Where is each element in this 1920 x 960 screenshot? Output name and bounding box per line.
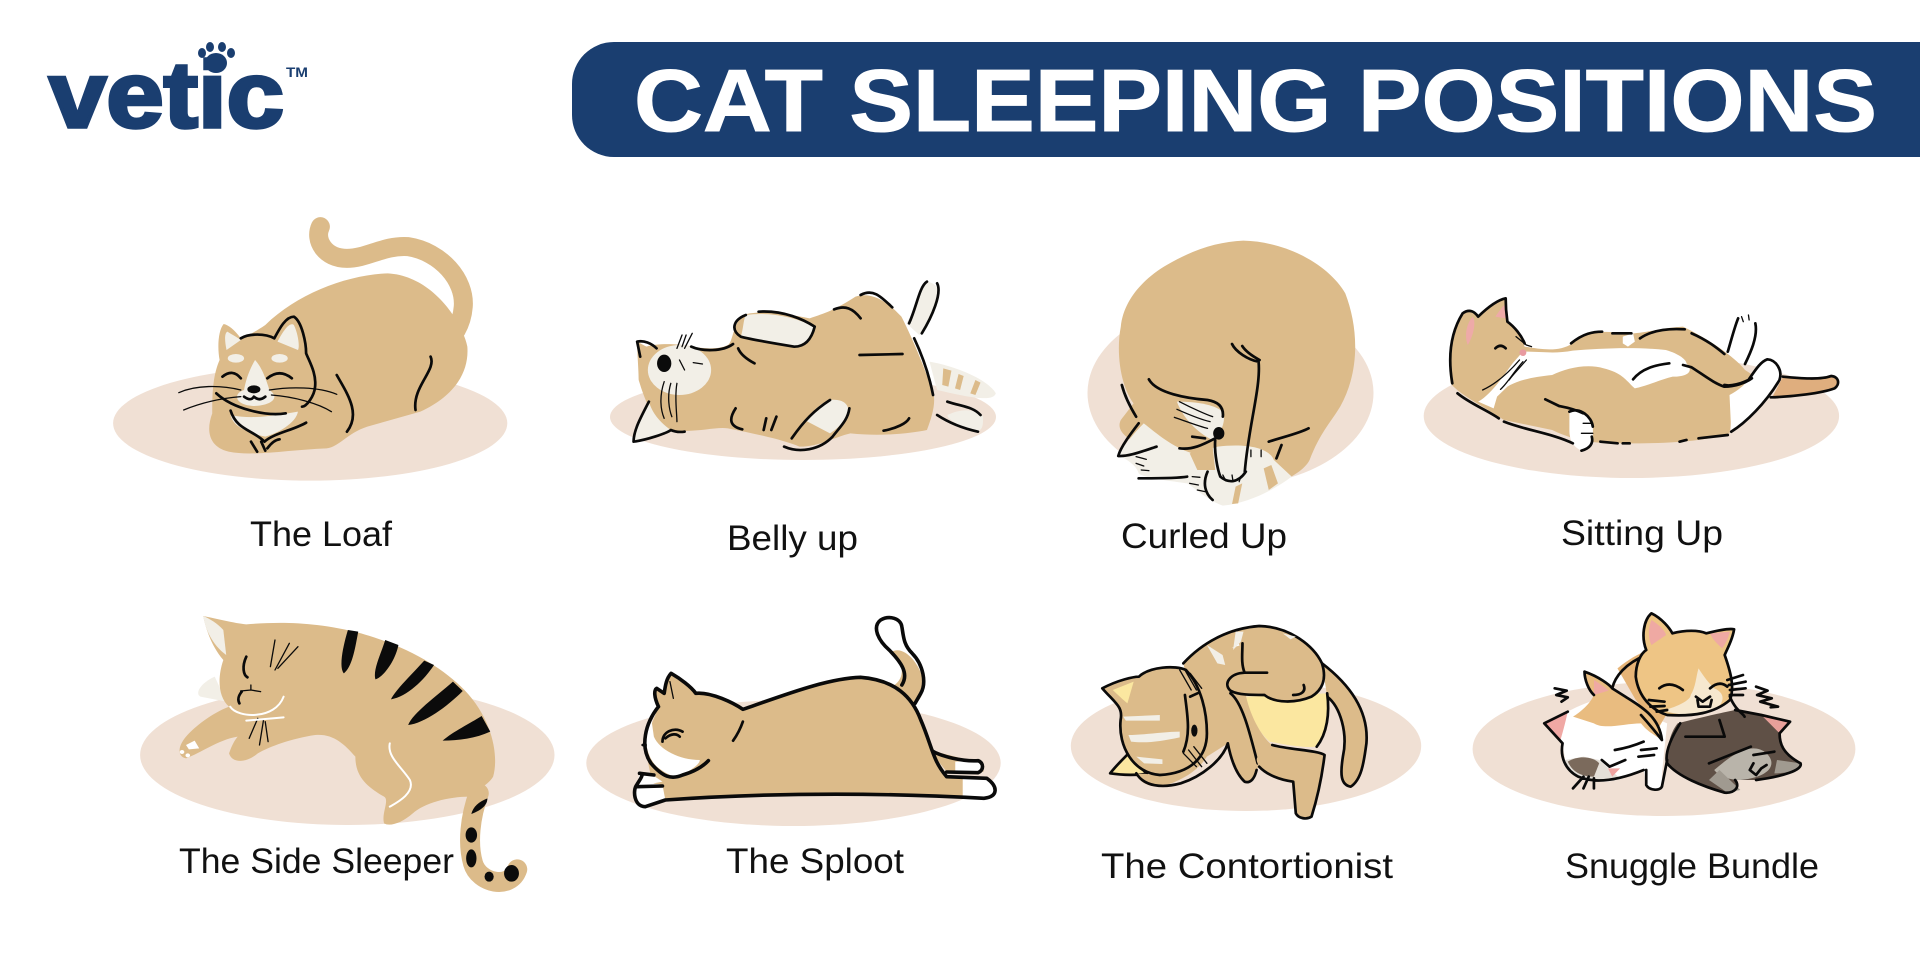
cat: curled up <box>1118 241 1355 506</box>
label: The Side Sleeper <box>179 842 454 881</box>
label: Sitting Up <box>1561 514 1723 553</box>
panel: Snuggle Bundle <box>1473 613 1855 886</box>
cushion <box>1071 681 1421 811</box>
title banner: CAT SLEEPING POSITIONS <box>634 51 1877 150</box>
cat: contortionist <box>1102 626 1367 818</box>
cushion <box>610 374 996 460</box>
panel: The Contortionist <box>1071 626 1421 886</box>
label: Belly up <box>727 519 858 558</box>
cushion <box>1088 300 1374 486</box>
panel: Sitting Up <box>1424 298 1839 553</box>
panel: The Sploot <box>586 618 1001 881</box>
cat: sploot <box>635 618 995 807</box>
cat: loaf <box>179 227 468 453</box>
label: The Loaf <box>250 515 392 554</box>
logo: vetic: TM <box>286 64 308 80</box>
cushion <box>113 366 507 481</box>
panel: The Side Sleeper <box>140 616 555 882</box>
cushion <box>586 700 1001 826</box>
cats: snuggle bundle <box>1544 613 1801 793</box>
cushion <box>1473 682 1855 816</box>
cat: belly up <box>634 282 996 450</box>
panel: The Loaf <box>113 227 507 554</box>
label: The Contortionist <box>1101 847 1393 886</box>
panel: Belly up <box>610 282 996 558</box>
cat: sitting up <box>1450 298 1838 451</box>
label: Curled Up <box>1121 517 1287 556</box>
label: The Sploot <box>726 842 904 881</box>
panel: Curled Up <box>1088 241 1374 556</box>
cat: side sleeper <box>180 616 519 882</box>
cushion <box>1424 354 1839 478</box>
icon: paw <box>198 42 235 73</box>
cushion <box>140 685 555 825</box>
label: Snuggle Bundle <box>1565 847 1819 886</box>
logo: vetic: vetic <box>49 42 284 147</box>
